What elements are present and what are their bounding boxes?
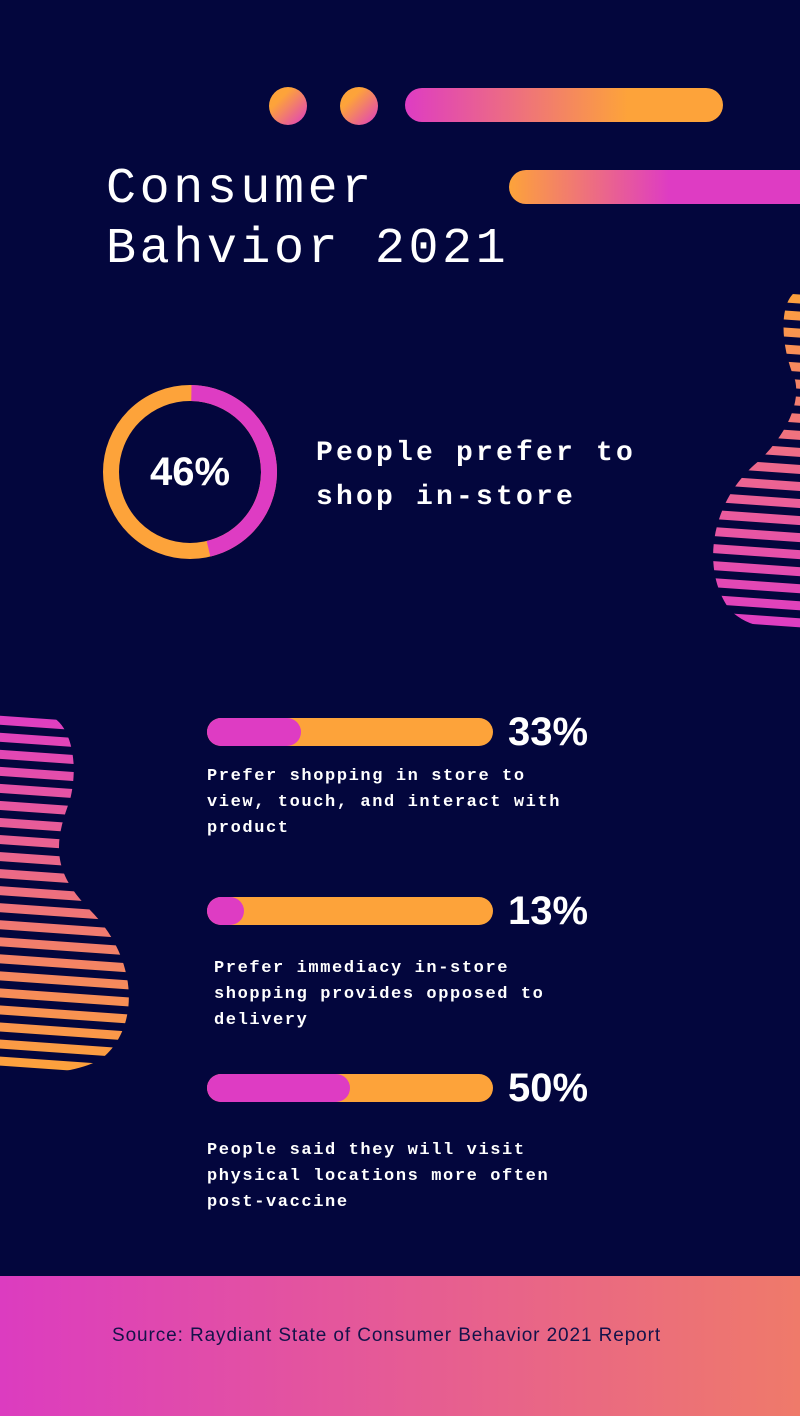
footer (0, 1276, 800, 1416)
headline stat text: shop in-store (316, 482, 576, 513)
title (106, 161, 509, 278)
blob left (0, 713, 129, 1074)
headline stat text (316, 438, 636, 513)
text: People said they will visit (207, 1141, 526, 1160)
stat 3: 50% (508, 1066, 588, 1110)
text: post-vaccine (207, 1193, 349, 1212)
donut chart (110, 392, 270, 552)
bar 2 (207, 897, 493, 925)
bar 3 (207, 1074, 493, 1102)
blob right (713, 290, 800, 629)
text: physical locations more often (207, 1167, 549, 1186)
stat 1: 33% (508, 710, 588, 754)
text: Prefer immediacy in-store (214, 959, 509, 978)
bar 1 (207, 718, 493, 746)
icon: dots and pills (269, 87, 800, 204)
title: Bahvior 2021 (106, 221, 509, 278)
title: Consumer (106, 161, 375, 218)
text: product (207, 819, 290, 838)
source text: Source: Raydiant State of Consumer Behavior 2021 Report (112, 1325, 661, 1346)
text: view, touch, and interact with (207, 793, 561, 812)
stat 2: 13% (508, 889, 588, 933)
text: shopping provides opposed to (214, 985, 544, 1004)
decorative shapes (0, 87, 800, 1102)
text: Prefer shopping in store to (207, 767, 526, 786)
text: delivery (214, 1011, 308, 1030)
donut value: 46% (150, 450, 230, 494)
headline stat text: People prefer to (316, 438, 636, 469)
